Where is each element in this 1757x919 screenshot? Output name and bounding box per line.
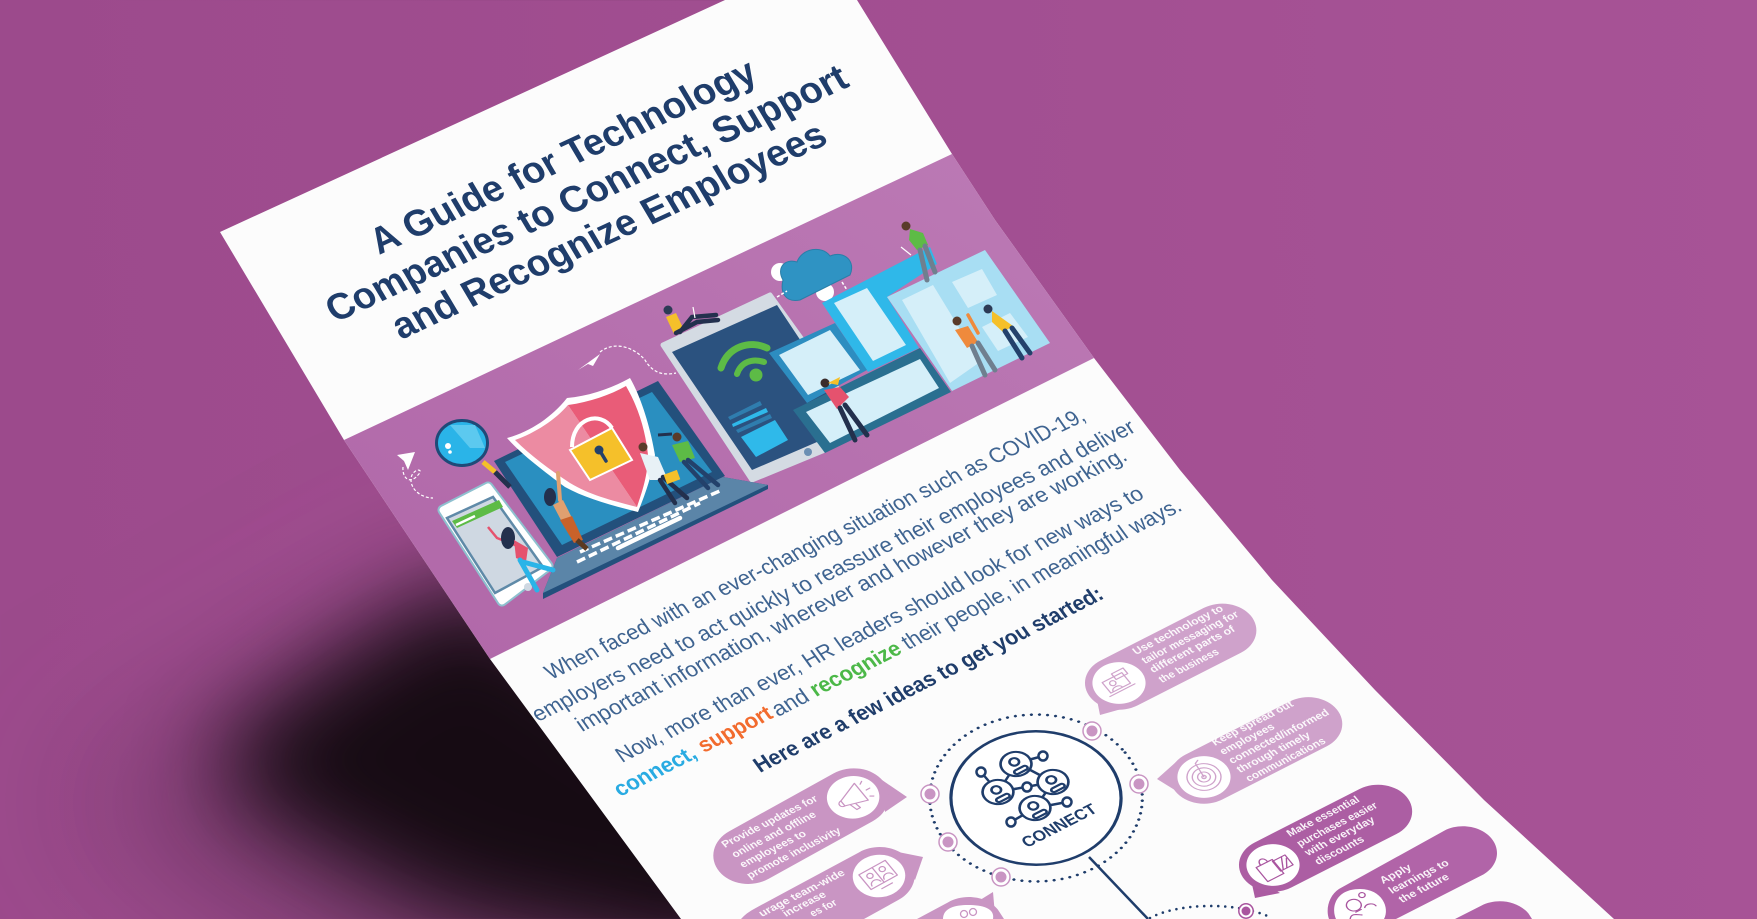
paper sheet: [220, 0, 1614, 919]
call to action paragraph: recognize: [804, 636, 906, 701]
pill: team-wide activity: urage team-wide: [756, 867, 848, 919]
pill: online and offline updates: Provide updates for: [719, 793, 821, 850]
call to action paragraph: their people, in meaningful ways.: [896, 493, 1186, 654]
pill: apply learnings: Apply: [1377, 862, 1414, 886]
connect circle with network icon: CONNECT: [1018, 801, 1101, 851]
call to action paragraph: Now, more than ever, HR leaders should look for new ways to: [610, 481, 1148, 767]
connect circle with network icon: [918, 706, 1154, 890]
pill: apply learnings: the future: [1396, 871, 1452, 905]
phone: [443, 487, 553, 601]
pill: online and offline updates: online and offline: [729, 809, 819, 860]
call to action paragraph: support: [692, 701, 778, 757]
pill: technology messaging: Use technology to: [1130, 603, 1227, 657]
pill: timely communications: through timely: [1234, 730, 1313, 775]
pill: team-wide activity: [741, 846, 923, 919]
intro paragraph: employers need to act quickly to reassure their employees and deliver: [526, 415, 1140, 726]
pill: technology messaging: tailor messaging for: [1139, 609, 1241, 666]
pill: team-wide activity: increase: [780, 889, 829, 919]
pill: apply learnings: [1328, 826, 1497, 919]
title: Companies to Connect, Support: [318, 57, 856, 331]
ring nodes: [921, 722, 1253, 918]
title: A Guide for Technology: [362, 51, 764, 263]
title: and Recognize Employees: [384, 114, 834, 348]
pill: timely communications: [1157, 687, 1355, 814]
connector line: [1089, 857, 1148, 919]
pill: everyday discounts: [1226, 774, 1425, 902]
connect dotted ring: [889, 683, 1183, 913]
pill: technology messaging: [1072, 593, 1269, 720]
laptop: [494, 381, 768, 599]
people on laptop: [544, 432, 718, 549]
purple illustration band: [344, 154, 1094, 659]
tablet with wifi: [663, 295, 860, 480]
pill: everyday discounts: purchases easier: [1294, 800, 1380, 849]
pill: bottom centre partial: [917, 892, 1004, 919]
intro paragraph: When faced with an ever-changing situation such as COVID-19,: [539, 403, 1090, 684]
pill: online and offline updates: [700, 757, 907, 895]
cloud and gears: [771, 249, 852, 301]
pill: everyday discounts: with everyday: [1301, 814, 1378, 859]
icon: paper plane and dashed trail left: [397, 452, 433, 498]
pill: timely communications: employees: [1217, 721, 1278, 757]
pill: technology messaging: different parts of: [1147, 624, 1238, 675]
pill: everyday discounts: discounts: [1312, 834, 1367, 867]
pill: everyday discounts: Make essential: [1284, 794, 1362, 839]
icon: paper plane and dashed trail right: [578, 346, 676, 374]
pill: bottom right partial: [1455, 901, 1532, 919]
windows: [769, 247, 1050, 453]
magnifying glass: [436, 420, 510, 487]
pill: technology messaging: the business: [1156, 646, 1222, 685]
intro paragraph: important information, wherever and however they are working.: [570, 443, 1132, 736]
pill: online and offline updates: employees to: [737, 828, 810, 870]
pill: team-wide activity: es for: [807, 897, 840, 919]
pill: apply learnings: learnings to: [1386, 857, 1452, 896]
shield with padlock: [507, 378, 655, 512]
subheading: Here are a few ideas to get you started:: [748, 582, 1108, 777]
call to action paragraph: and: [766, 684, 814, 721]
call to action paragraph: connect,: [608, 741, 701, 801]
pill: timely communications: connected/informed: [1226, 707, 1332, 766]
illustration: technology scene: [397, 222, 1050, 601]
pill: timely communications: Keep spread out: [1209, 698, 1297, 748]
pill: timely communications: communications: [1243, 735, 1329, 784]
people on windows and tablet: [664, 222, 1030, 440]
pill: online and offline updates: promote inclusivity: [744, 825, 844, 881]
support dotted ring: [1150, 906, 1272, 918]
